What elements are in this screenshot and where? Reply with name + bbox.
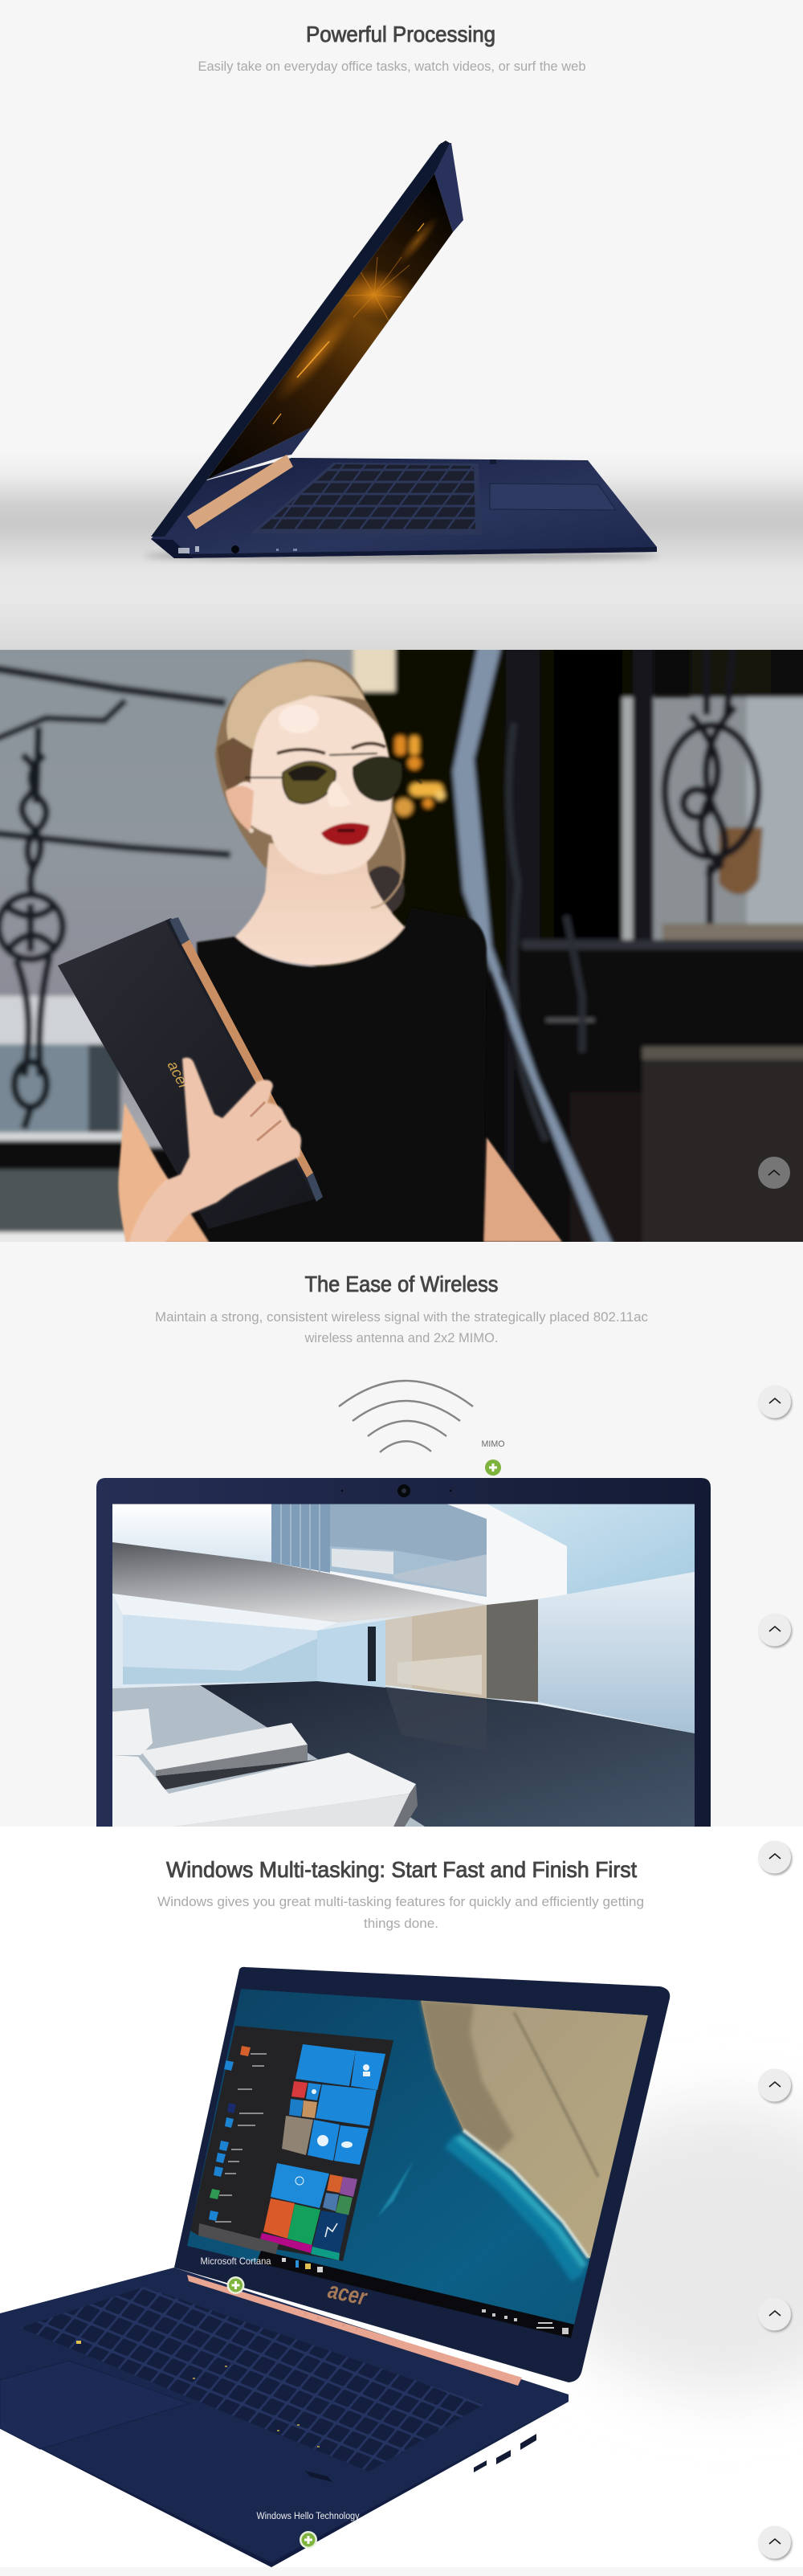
scroll button dark — [758, 1157, 790, 1189]
subtitle: wireless signal: Maintain a strong, consistent wireless signal with the strategically placed 802.11ac — [155, 1310, 648, 1325]
scroll button 5 — [758, 2297, 792, 2333]
title: powerful processing: Powerful Processing — [306, 22, 495, 47]
section: powerful processing — [0, 0, 803, 650]
subtitle: multi-tasking features: Windows gives you great multi-tasking features for quickly and efficiently getting — [157, 1895, 644, 1909]
neck and chest — [235, 843, 405, 965]
photo: woman holding laptop — [0, 627, 803, 1269]
scroll button 1 — [758, 1385, 792, 1420]
land — [421, 2000, 648, 2258]
label: mimo: MIMO — [482, 1439, 505, 1449]
title: windows multi-tasking: Windows Multi-tasking: Start Fast and Finish First — [166, 1857, 637, 1882]
laptop lid — [174, 1967, 670, 2382]
lips — [321, 823, 369, 845]
hair wisp — [371, 819, 403, 908]
subtitle: multi-tasking features — [157, 1895, 644, 1931]
right window — [622, 697, 803, 946]
scroll button 4 — [758, 2069, 792, 2103]
subtitle: everyday tasks: Easily take on everyday office tasks, watch videos, or surf the web — [198, 59, 586, 74]
black laptop — [58, 917, 323, 1229]
image: laptop side view — [145, 141, 658, 561]
rose gold hinge strip — [187, 2275, 522, 2386]
background scene — [0, 627, 803, 1269]
start menu — [190, 2026, 393, 2261]
right arm — [484, 1137, 562, 1242]
subtitle: wireless signal — [155, 1310, 648, 1345]
swift logo: S W I F T — [303, 2312, 359, 2333]
taskbar — [256, 2251, 578, 2341]
front lounger shadow — [156, 1759, 321, 1790]
keyboard — [20, 2287, 484, 2472]
face — [227, 696, 392, 875]
label: windows hello technology: Windows Hello Technology — [257, 2512, 360, 2521]
icon: wifi arcs — [339, 1381, 473, 1452]
icon: windows hello plus — [300, 2531, 317, 2549]
hair back — [214, 659, 406, 881]
dress — [185, 908, 487, 1242]
label: microsoft cortana: Microsoft Cortana — [201, 2256, 271, 2267]
icon: cortana plus — [226, 2276, 244, 2294]
woman — [118, 659, 562, 1243]
left upper arm — [118, 1103, 209, 1243]
desktop screen — [187, 1989, 648, 2341]
acer logo: acer — [326, 2278, 369, 2311]
acer logo: acer — [164, 1058, 193, 1093]
scroll button 2 — [758, 1613, 792, 1648]
dark doorway — [313, 627, 634, 972]
finger creases — [251, 1102, 281, 1141]
laptop base — [0, 2268, 569, 2567]
side ports — [474, 2434, 536, 2472]
title: the ease of wireless: The Ease of Wireless — [305, 1272, 498, 1296]
hand — [128, 1058, 301, 1243]
subtitle: multi-tasking features: things done. — [364, 1917, 438, 1931]
icon: mimo plus — [485, 1459, 501, 1476]
fingerprint reader — [305, 2471, 332, 2482]
image: laptop three-quarter view — [0, 1967, 670, 2567]
image: laptop front with poolside screen — [96, 1478, 711, 1827]
section: the ease of wireless — [96, 1276, 711, 1827]
section: windows multi-tasking — [0, 1827, 803, 2576]
scroll button 3 — [758, 1841, 792, 1875]
scroll button 6 — [758, 2525, 792, 2561]
sunglasses — [245, 753, 422, 803]
subtitle: wireless signal: wireless antenna and 2x2 MIMO. — [304, 1331, 498, 1345]
